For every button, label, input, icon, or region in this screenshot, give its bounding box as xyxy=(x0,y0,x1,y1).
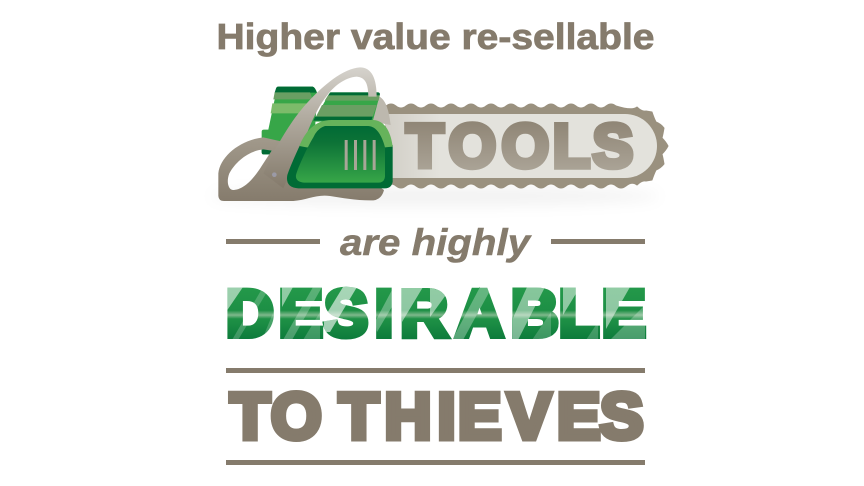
subheading: are highly with side rules: are highly xyxy=(340,222,533,263)
rivet xyxy=(272,172,277,177)
fuel block upper left xyxy=(262,87,317,154)
saw bar with scalloped chain xyxy=(386,104,668,188)
headline: TO THIEVES: TO THIEVES xyxy=(230,380,643,452)
rule above thieves xyxy=(226,368,645,373)
subheading: are highly with side rules xyxy=(226,222,645,263)
front cover xyxy=(287,120,393,188)
rear gray panel xyxy=(372,96,391,125)
rear handle xyxy=(218,137,384,201)
ground shadow xyxy=(210,186,660,206)
arched top handle xyxy=(263,67,377,188)
chainsaw illustration xyxy=(210,67,668,206)
rule below thieves xyxy=(226,460,645,465)
heading: higher value re-sellable: Higher value re-sellable xyxy=(216,16,654,57)
vent slots xyxy=(345,140,376,170)
bar label: TOOLS: TOOLS xyxy=(406,112,633,180)
fuel block upper right xyxy=(313,92,380,122)
headline: DESIRABLE: DESIRABLE xyxy=(226,276,646,350)
saw body xyxy=(218,67,393,201)
